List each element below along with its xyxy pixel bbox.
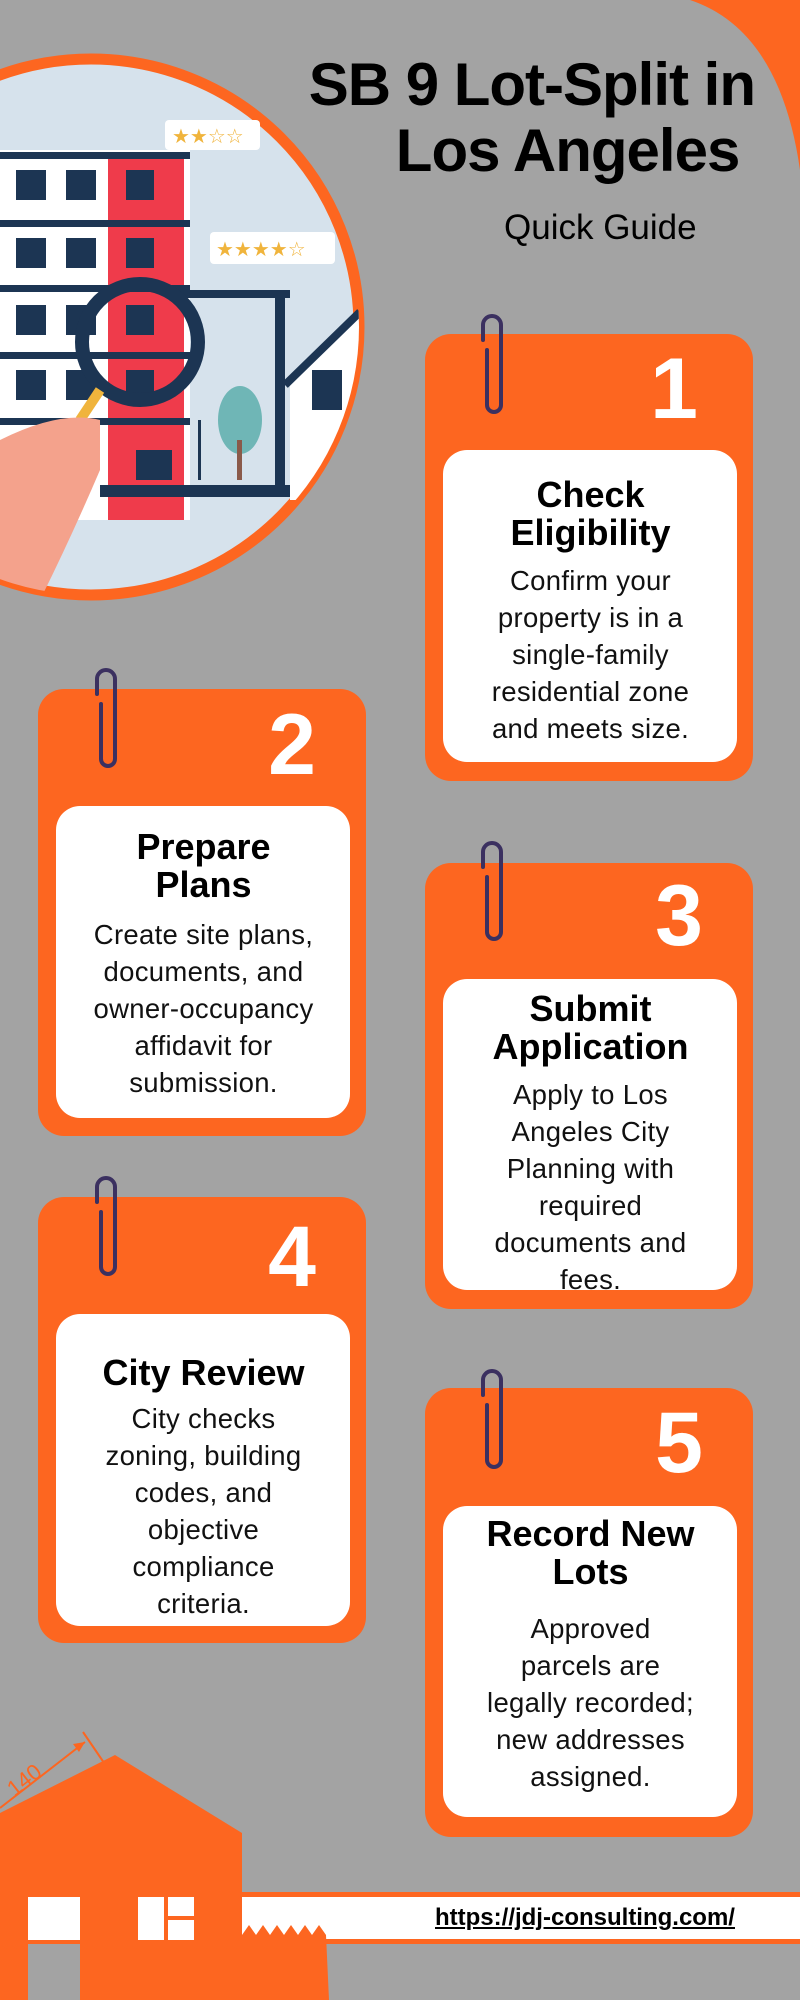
- card 5 body: new addresses: [496, 1724, 685, 1755]
- card 4 title: City Review: [102, 1352, 305, 1393]
- number 5: 5: [655, 1395, 703, 1491]
- card 5 title: Record New: [486, 1513, 695, 1554]
- card 4 body: [106, 1403, 301, 1619]
- card 5: [425, 1388, 753, 1837]
- card 3 title: Application: [492, 1026, 688, 1067]
- white content box: [56, 1314, 350, 1626]
- footer url: https://jdj-consulting.com/: [435, 1904, 735, 1931]
- white content box: [443, 979, 737, 1290]
- card 5 body: assigned.: [530, 1761, 651, 1792]
- subtitle: Quick Guide: [504, 208, 697, 247]
- illustration: city buildings in circle: [0, 54, 364, 600]
- card 2 body: Create site plans,: [94, 919, 313, 950]
- title: Los Angeles: [396, 117, 739, 184]
- card 2 title: Plans: [155, 864, 252, 905]
- house illustration: [0, 1731, 329, 2000]
- card 3: [425, 863, 753, 1309]
- number 1: 1: [650, 341, 698, 437]
- card 2 body: submission.: [129, 1067, 278, 1098]
- card 3 body: documents and: [495, 1227, 686, 1258]
- card 1 body: property is in a: [498, 602, 683, 633]
- card 5 body: Approved: [530, 1613, 651, 1644]
- card 2 title: [136, 826, 271, 905]
- card 1 body: and meets size.: [492, 713, 689, 744]
- card 1 body: [492, 565, 689, 744]
- white content box: [443, 1506, 737, 1817]
- card 3 body: Angeles City: [512, 1116, 669, 1147]
- card 2 body: [93, 919, 314, 1098]
- card 1 body: single-family: [512, 639, 669, 670]
- house illustration: 140: [2, 1759, 46, 1801]
- title: [309, 51, 755, 184]
- card 3 body: required: [539, 1190, 642, 1221]
- white content box: [443, 450, 737, 762]
- card 3 title: Submit: [530, 988, 652, 1029]
- card 5 body: parcels are: [521, 1650, 660, 1681]
- card 1 body: residential zone: [492, 676, 689, 707]
- white content box: [56, 806, 350, 1118]
- footer stripe: [0, 1892, 800, 1944]
- card 5 body: legally recorded;: [487, 1687, 694, 1718]
- card 4 body: City checks: [132, 1403, 275, 1434]
- title: SB 9 Lot-Split in: [309, 51, 755, 118]
- card 2 body: owner-occupancy: [93, 993, 314, 1024]
- card 3 title: [492, 988, 688, 1067]
- card 4 body: zoning, building: [106, 1440, 301, 1471]
- card 5 title: [486, 1513, 695, 1592]
- card 1 title: Eligibility: [510, 512, 670, 553]
- card 1: [425, 334, 753, 781]
- card 2 body: documents, and: [104, 956, 303, 987]
- card 1 title: Check: [536, 474, 645, 515]
- number 3: 3: [655, 868, 703, 964]
- card 2: [38, 689, 366, 1136]
- card 2 title: Prepare: [136, 826, 271, 867]
- card 4 body: objective: [148, 1514, 259, 1545]
- illustration: city buildings in circle: ★★★★☆: [216, 239, 306, 261]
- card 4: [38, 1197, 366, 1643]
- card 3 body: Apply to Los: [513, 1079, 668, 1110]
- card 3 body: fees.: [560, 1264, 621, 1295]
- card 1 title: [510, 474, 670, 553]
- card 5 body: [487, 1613, 694, 1792]
- card 4 body: compliance: [132, 1551, 275, 1582]
- card 2 body: affidavit for: [135, 1030, 272, 1061]
- card 4 body: codes, and: [135, 1477, 272, 1508]
- decorative orange corner shape: [690, 0, 800, 170]
- card 3 body: Planning with: [507, 1153, 674, 1184]
- card 1 body: Confirm your: [510, 565, 671, 596]
- number 4: 4: [268, 1209, 316, 1305]
- card 5 title: Lots: [552, 1551, 628, 1592]
- illustration: city buildings in circle: ★★☆☆: [172, 126, 244, 148]
- number 2: 2: [268, 697, 316, 793]
- card 3 body: [495, 1079, 686, 1295]
- card 4 body: criteria.: [157, 1588, 250, 1619]
